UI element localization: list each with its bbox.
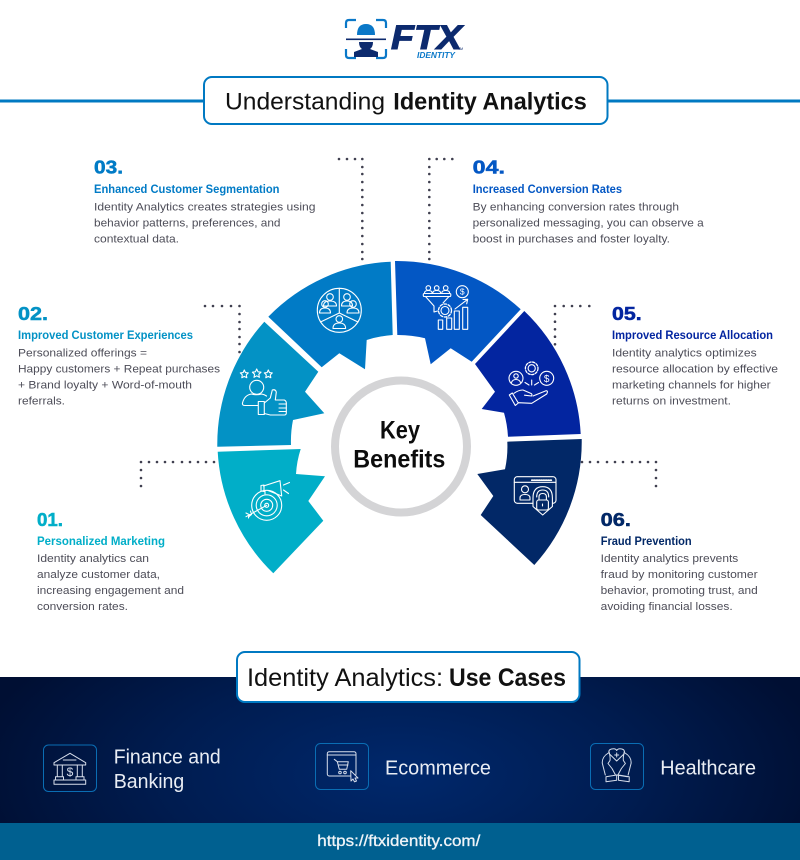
text block 06: fraud prevention: Identity analytics prevents — [601, 553, 739, 565]
text block 02: improved customer experiences: Improved Customer Experiences — [18, 330, 193, 342]
text block 02: improved customer experiences: + Brand loyalty + Word-of-mouth — [18, 380, 192, 392]
text block 05: improved resource allocation: 05. — [612, 304, 642, 324]
center: key benefits — [335, 380, 467, 512]
text block 04: increased conversion rates: Increased Conversion Rates — [473, 184, 622, 196]
icon: id card and lock shield — [514, 477, 556, 515]
segment 04: royal blue with funnel icon — [395, 261, 521, 364]
text block 02: improved customer experiences: Happy customers + Repeat purchases — [18, 364, 221, 376]
text block 05: improved resource allocation: Identity analytics optimizes — [612, 348, 757, 360]
segment 05: dark blue with resource hand icon — [475, 311, 581, 437]
text block 04: increased conversion rates: By enhancing conversion rates through — [473, 202, 679, 214]
text block 04: increased conversion rates: personalized messaging, you can observe a — [473, 218, 705, 230]
center: key benefits: Benefits — [353, 445, 445, 473]
text block 02: improved customer experiences: referrals. — [18, 396, 65, 408]
icon: hand holding resources — [509, 362, 554, 406]
text block 05: improved resource allocation: resource allocation by effective — [612, 364, 778, 376]
icon label: dollar sign: $ — [460, 287, 465, 297]
logo: FTX Identity: TM — [458, 47, 463, 51]
icon label: dollar sign: $ — [67, 765, 74, 779]
text block 05: improved resource allocation: Improved Resource Allocation — [612, 330, 773, 342]
icon: hands holding heart — [602, 749, 631, 782]
connector dots: 05 — [554, 305, 591, 346]
use cases heading: Identity Analytics: — [247, 664, 443, 692]
text block 01: personalized marketing — [37, 510, 184, 613]
text block 06: fraud prevention: behavior, promoting trust, and — [601, 585, 758, 597]
icon: rating person thumbs up — [240, 369, 286, 415]
logo: FTX Identity: IDENTITY — [417, 50, 456, 60]
text block 03: enhanced customer segmentation: Enhanced Customer Segmentation — [94, 184, 280, 196]
use cases heading: Use Cases — [449, 664, 566, 692]
segment 06: navy with fraud prevention icon — [477, 439, 582, 565]
connector dots: 03 — [338, 158, 364, 260]
text block 01: personalized marketing: conversion rates. — [37, 601, 128, 613]
footer bar with url: https://ftxidentity.com/ — [317, 833, 481, 850]
footer bar with url — [0, 823, 800, 860]
text block 01: personalized marketing: analyze customer data, — [37, 569, 160, 581]
text block 06: fraud prevention: avoiding financial losses. — [601, 601, 733, 613]
use cases dark band — [0, 677, 800, 823]
text block 06: fraud prevention: Fraud Prevention — [601, 536, 692, 548]
segment 01: teal with target icon — [218, 449, 325, 573]
center: key benefits: Key — [380, 416, 420, 444]
text block 04: increased conversion rates: 04. — [473, 157, 505, 177]
text block 05: improved resource allocation: returns on investment. — [612, 396, 731, 408]
use case: finance and banking: Finance and — [114, 746, 221, 768]
use case: ecommerce — [316, 744, 491, 790]
connector dots: 02 — [204, 305, 241, 353]
icon: target and megaphone — [246, 481, 290, 520]
title — [204, 77, 608, 124]
icon: conversion funnel and bars — [423, 286, 468, 329]
title: Understanding — [225, 88, 385, 115]
use case: finance and banking: Banking — [114, 771, 184, 793]
segment 02: blue with thumbs-up icon — [217, 322, 324, 447]
text block 01: personalized marketing: 01. — [37, 510, 63, 530]
text block 01: personalized marketing: Identity analytics can — [37, 553, 149, 565]
text block 01: personalized marketing: Personalized Marketing — [37, 536, 165, 548]
text block 03: enhanced customer segmentation: behavior patterns, preferences, and — [94, 218, 280, 230]
use cases heading — [237, 652, 580, 702]
text block 06: fraud prevention: 06. — [601, 510, 631, 530]
text block 04: increased conversion rates: boost in purchases and foster loyalty. — [473, 234, 670, 246]
text block 02: improved customer experiences: Personalized offerings = — [18, 348, 147, 360]
logo: FTX Identity: FTX — [391, 19, 465, 57]
connector dots: 06 — [581, 461, 657, 487]
text block 03: enhanced customer segmentation — [94, 157, 316, 246]
text block 02: improved customer experiences: 02. — [18, 304, 48, 324]
icon label: dollar sign: $ — [544, 374, 550, 385]
use case: healthcare: Healthcare — [660, 757, 756, 779]
text block 06: fraud prevention: fraud by monitoring customer — [601, 569, 758, 581]
text block 01: personalized marketing: increasing engagement and — [37, 585, 184, 597]
header rule — [0, 100, 800, 102]
connector dots: 01 — [140, 461, 215, 487]
segment 03: blue with customer segments icon — [268, 262, 393, 369]
text block 04: increased conversion rates — [473, 157, 705, 246]
text block 05: improved resource allocation — [612, 304, 778, 408]
icon: segmented people circle — [317, 288, 361, 332]
use case: finance and banking — [44, 745, 221, 793]
text block 02: improved customer experiences — [18, 304, 221, 408]
text block 03: enhanced customer segmentation: contextual data. — [94, 234, 179, 246]
text block 05: improved resource allocation: marketing channels for higher — [612, 380, 771, 392]
title: Identity Analytics — [393, 88, 587, 115]
logo: FTX Identity — [346, 19, 465, 60]
text block 03: enhanced customer segmentation: 03. — [94, 157, 123, 177]
use case: healthcare — [590, 744, 756, 790]
icon: bank — [54, 753, 86, 784]
text block 06: fraud prevention — [601, 510, 758, 613]
icon: shopping cart in browser — [327, 752, 358, 782]
use case: ecommerce: Ecommerce — [385, 757, 491, 779]
connector dots: 04 — [428, 158, 454, 260]
text block 03: enhanced customer segmentation: Identity Analytics creates strategies using — [94, 202, 316, 214]
